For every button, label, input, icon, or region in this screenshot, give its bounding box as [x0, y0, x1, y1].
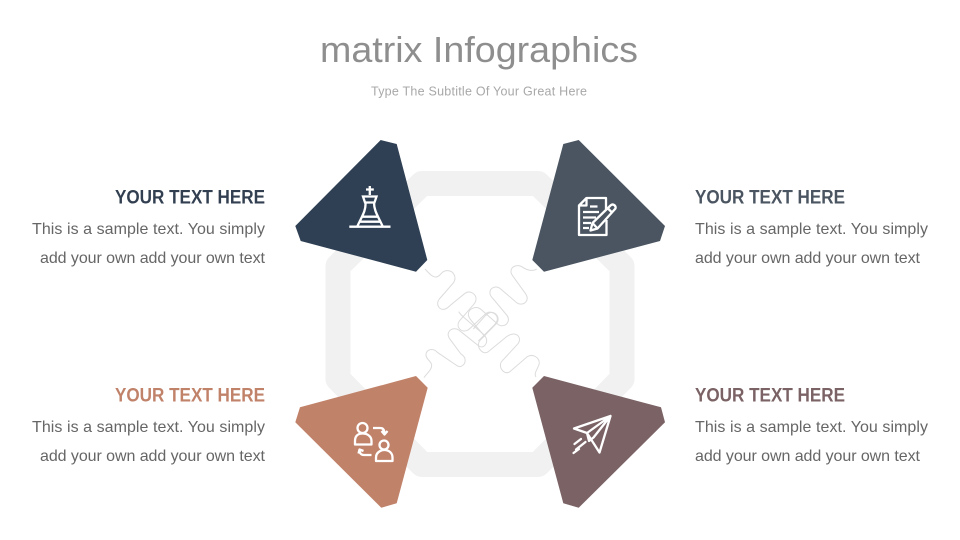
text block: top left: add your own add your own text [40, 250, 266, 267]
central octagon ring [338, 184, 622, 464]
icon: document and pencil [579, 198, 616, 235]
text block: bottom right [695, 386, 928, 465]
text block: top right [695, 188, 928, 267]
text block: top left [32, 188, 266, 267]
text block: bottom left [32, 386, 266, 465]
icon: chess piece [349, 186, 390, 227]
text block: top right: YOUR TEXT HERE [695, 188, 845, 208]
text block: bottom right: add your own add your own text [695, 448, 921, 465]
panel: top-left triangle [295, 140, 427, 272]
text block: top right: add your own add your own text [695, 250, 921, 267]
text block: bottom left: This is a sample text. You simply [32, 419, 265, 436]
subtitle: Type The Subtitle Of Your Great Here [371, 84, 587, 98]
icon: paper plane [574, 416, 610, 453]
text block: bottom left: add your own add your own text [40, 448, 266, 465]
text block: bottom right: YOUR TEXT HERE [695, 386, 845, 406]
icon: two people exchanging [355, 423, 392, 461]
text block: bottom left: YOUR TEXT HERE [115, 386, 265, 406]
connecting squiggle lines [424, 266, 539, 378]
text block: top right: This is a sample text. You simply [695, 221, 928, 238]
panel: top-right triangle [532, 140, 665, 272]
panel: bottom-left triangle [295, 376, 428, 508]
panel: bottom-right triangle [532, 376, 665, 508]
text block: bottom right: This is a sample text. You simply [695, 419, 928, 436]
title: matrix Infographics [320, 29, 638, 70]
text block: top left: This is a sample text. You simply [32, 221, 265, 238]
text block: top left: YOUR TEXT HERE [115, 188, 265, 208]
